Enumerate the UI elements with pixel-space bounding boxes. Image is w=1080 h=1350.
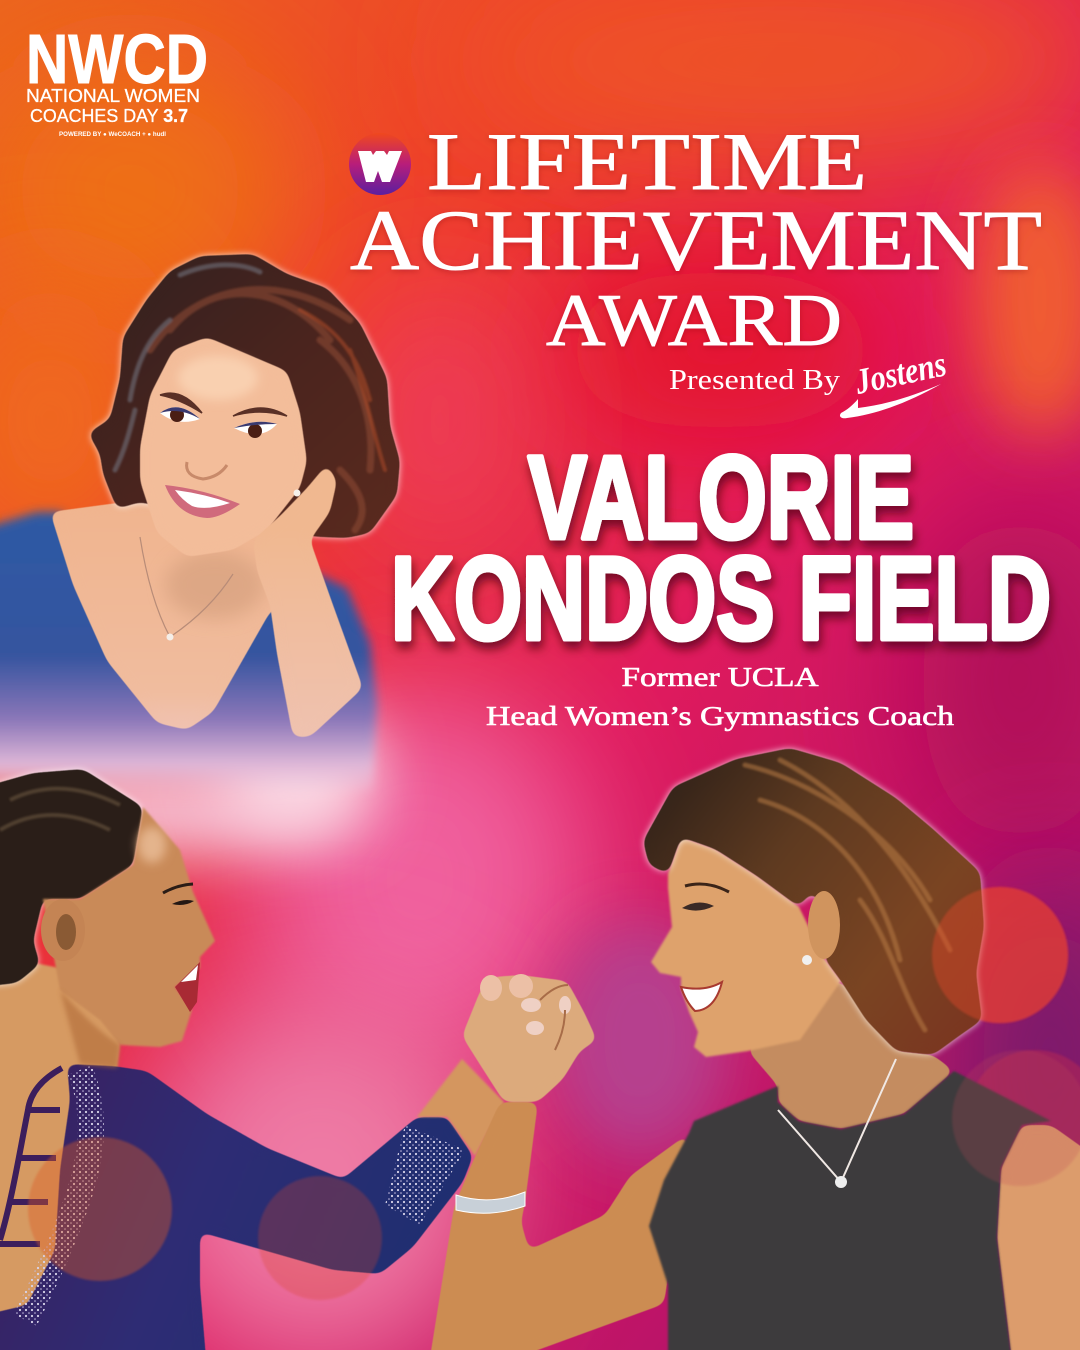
nose (187, 462, 227, 479)
title: lifetime achievement award: AWARD (546, 280, 842, 362)
presented by Jostens (669, 344, 950, 418)
necklace (140, 537, 233, 637)
clasped hands (462, 974, 597, 1102)
photo: gymnast bottom left (0, 769, 504, 1350)
logo powered by: POWERED BY ● WeCOACH + ● hudl (59, 132, 166, 138)
title: lifetime achievement award: ACHIEVEMENT (350, 192, 1042, 288)
logo tagline: NATIONAL WOMEN (26, 85, 200, 106)
gymnast ear (41, 899, 85, 961)
NWCD logo: COACHES DAY 3.7 (30, 105, 188, 126)
gymnast hair highlights (0, 789, 120, 830)
eyebrows (160, 393, 287, 416)
presented by Jostens: Presented By (669, 365, 840, 396)
gymnast skin forearm (417, 1059, 504, 1156)
title: lifetime achievement award: LIFETIME (427, 116, 867, 207)
neck shadow (165, 551, 265, 619)
NWCD wordmark: NWCD (26, 20, 208, 98)
coach necklace (778, 1059, 896, 1182)
subtitle: role (486, 662, 955, 731)
gymnast hair (0, 769, 143, 987)
gymnast jaw shadow (60, 990, 120, 1068)
arm and hand (253, 464, 363, 737)
gymnast back and neck skin (0, 960, 120, 1330)
icon: Jostens script logo (840, 344, 950, 418)
eyes (160, 407, 277, 438)
gymnast leotard and arm (0, 1064, 473, 1350)
coach hair highlights (745, 760, 950, 1030)
blue top (0, 512, 377, 810)
hair highlights (115, 265, 385, 530)
coach ear (808, 891, 840, 959)
name: Valorie Kondos Field (391, 432, 1051, 665)
bokeh over coach hair and shoulder (932, 887, 1068, 1023)
chest and neck (50, 500, 300, 730)
earring (294, 490, 300, 496)
face (140, 337, 307, 557)
title: lifetime achievement award (349, 116, 1042, 362)
gymnast forehead highlight (138, 827, 166, 863)
coach black dress (649, 1071, 1051, 1350)
coach smile (681, 982, 722, 1011)
leotard back straps (0, 1068, 62, 1244)
coach brow and eye (685, 884, 729, 892)
subtitle: role: Former UCLA (622, 662, 819, 692)
gymnast mouth (175, 962, 200, 1012)
name: Valorie Kondos Field: VALORIE (528, 432, 914, 564)
coach forearm and upper arm (428, 1102, 689, 1350)
bokeh on leotard (28, 1137, 172, 1281)
hair (88, 254, 400, 538)
leotard sequins (25, 1070, 91, 1320)
subtitle: role: Head Women’s Gymnastics Coach (486, 701, 955, 731)
gymnast eye and brow (163, 884, 193, 893)
coach face (651, 837, 841, 1057)
coach bracelet (456, 1192, 525, 1213)
coach earring (802, 955, 812, 965)
NWCD logo (26, 20, 208, 138)
photo: Valorie portrait top left (0, 254, 400, 810)
coach neck and collar (748, 981, 954, 1129)
coach right arm (997, 1125, 1080, 1350)
coach hair (643, 748, 984, 1055)
gymnast face (43, 807, 215, 1047)
smile (165, 485, 240, 518)
photo: Valorie coach bottom right (428, 748, 1080, 1350)
icon: Jostens script logo: Jostens (851, 344, 950, 402)
forehead highlight (178, 356, 258, 400)
icon: WeCoach circular logo (349, 133, 411, 195)
